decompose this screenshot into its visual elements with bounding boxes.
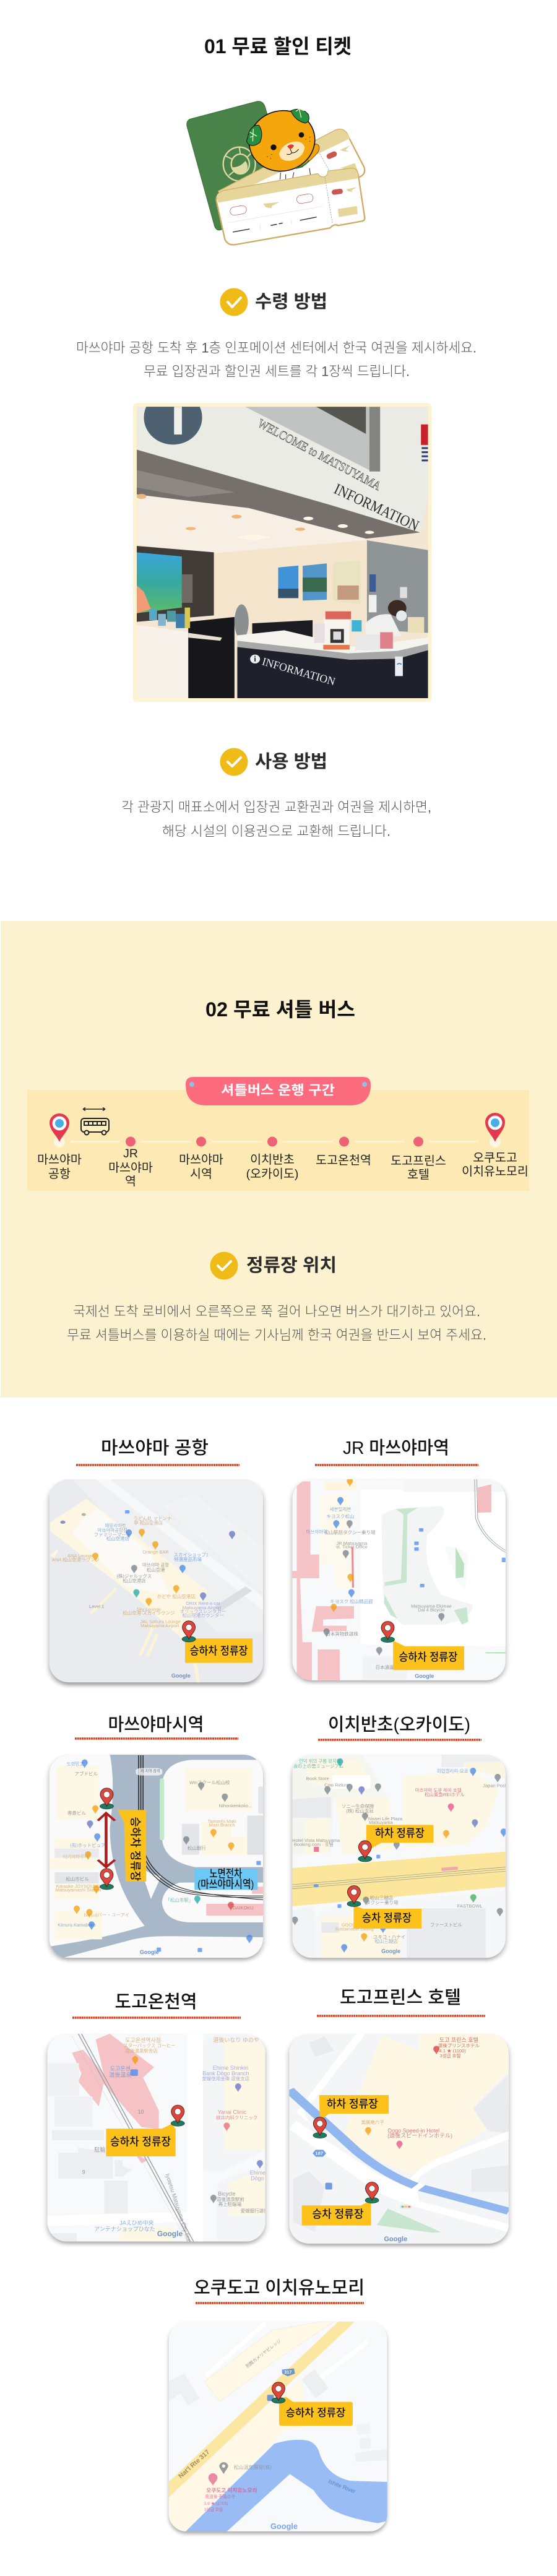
map image: Tamenhi Maki [208, 1818, 236, 1824]
callout: vertical boarding stop [118, 1810, 146, 1882]
map image: 美膳庵六子 [361, 2119, 384, 2125]
callout: boarding stop: 승하차 정류장 [190, 1645, 248, 1657]
stop labels: 시역 [190, 1167, 212, 1181]
callout: tram station [194, 1867, 257, 1891]
map image: JR Matsuyama [336, 1541, 368, 1546]
map image: 日本貨物鉄道株 [326, 1630, 358, 1636]
pill: route title: 셔틀버스 운행 구간 [221, 1083, 335, 1098]
text block: how to use: 각 관광지 매표소에서 입장권 교환권과 여권을 제시하면, [121, 800, 431, 815]
map image: ファーストビル [430, 1922, 462, 1927]
map image [289, 2034, 509, 2244]
map image: アブドビル [75, 1770, 98, 1776]
stop labels: 역 [125, 1175, 136, 1188]
back ticket [218, 129, 365, 212]
photo: airport information centre: i [254, 654, 256, 663]
stop labels: 오쿠도고 [473, 1151, 517, 1165]
pin marker [272, 2382, 285, 2403]
google mark: Google [171, 1672, 191, 1679]
route strip: shuttle bus section [27, 1077, 529, 1191]
map image [292, 1478, 506, 1680]
map image [292, 1755, 507, 1958]
map image: 마츠야마 도큐 레이 호텔 [415, 1787, 462, 1793]
map image: ソニー生命保険 [342, 1803, 374, 1809]
map image: (株)ジャルックス [116, 1573, 152, 1579]
map image: FASTBOWL [457, 1903, 483, 1909]
map image: Sustainable Dining [335, 1926, 374, 1932]
google mark: Google [384, 2236, 407, 2243]
stops [126, 1136, 423, 1146]
stop labels [37, 1147, 529, 1188]
map image: Nat'l Rte 317 [178, 2448, 211, 2480]
map image: 奥道後 壱湯の守 [205, 2494, 235, 2499]
map image: 오쿠도고 이치유노모리 [206, 2486, 257, 2493]
map panel: Matsuyama Airport [50, 1438, 263, 1685]
map image: Winスクール松山校 [189, 1779, 230, 1785]
search pill: 이 지역 검색 [140, 1768, 160, 1773]
map image: 「松山市駅」 [165, 1896, 193, 1903]
map image: Ehime [250, 2170, 266, 2176]
map image: Bank Dōgo Branch [202, 2070, 249, 2077]
map image: Matsuyamashi Station [56, 1887, 101, 1893]
map image: 道後温泉駅前 [217, 2196, 244, 2202]
map image: Dogo Speed-in Hotel [388, 2127, 439, 2133]
photo: airport information centre: WELCOME to MATSUYAMA [256, 417, 384, 493]
map image: Level 1 [89, 1604, 104, 1609]
map image: 道後プリンスホテル [438, 2042, 480, 2048]
heading: 01 free discount ticket: 01 무료 할인 티켓 [204, 35, 352, 58]
stop labels: 도고프린스 [391, 1154, 446, 1168]
text block: stop location [67, 1303, 486, 1343]
map image: スカイショップ1 [173, 1552, 209, 1557]
map image: 3성급 호텔 [204, 2507, 223, 2512]
stop labels: 이치반초 [250, 1153, 295, 1167]
map image: 마쓰야마 공항 [142, 1562, 169, 1568]
map title: 마쓰야마시역 [108, 1714, 204, 1735]
map image: 松山温泉開発(株) [234, 2464, 272, 2470]
map image: ファミリーマート [94, 1532, 131, 1537]
google mark: Google [157, 2229, 183, 2238]
callout: drop-off stop [319, 2095, 389, 2120]
map title: 오쿠도고 이치유노모리 [194, 2278, 365, 2298]
stop labels: 호텔 [407, 1168, 430, 1182]
pin marker: boarding [365, 2182, 379, 2203]
map image: JAえひめ中央 [119, 2219, 154, 2226]
map image: 道後温泉 [109, 2071, 131, 2078]
stop labels: 마쓰야마 [37, 1153, 82, 1167]
map image: タクシー乗り場 [366, 1899, 399, 1905]
callout: vertical boarding stop: 승하차 정류장 [129, 1817, 141, 1881]
map image: 坂の上の雲ミュージアム [293, 1763, 343, 1769]
map image: Hotel Vista Matsuyama [292, 1838, 340, 1843]
callout: boarding stop [106, 2124, 176, 2156]
icon: bus with arrow [81, 1108, 109, 1135]
map image: 317 [284, 2369, 291, 2375]
mascot: orange character [243, 104, 321, 179]
map image: 도고온센역사점 [125, 2036, 161, 2043]
map image: オリックスレンタカー [180, 1609, 226, 1614]
callout: boarding stop [302, 2200, 371, 2226]
map image: 세븐일레븐 [330, 1506, 351, 1512]
map image: 松山市ビル [66, 1875, 89, 1882]
pin: end [485, 1113, 505, 1148]
passport [187, 102, 295, 230]
text block: how to receive: 마쓰야마 공항 도착 후 1층 인포메이션 센터에서 한국 여권을 제시하세요. [76, 340, 477, 355]
map image [50, 1755, 263, 1958]
map image: 柳井内科クリニック [216, 2114, 257, 2120]
map panel: JR Matsuyama Station [292, 1438, 506, 1682]
callout: boarding stop: 승하차 정류장 [286, 2407, 346, 2419]
text block: how to use [121, 800, 431, 839]
map image: 회업갤러리-묘쿄 [437, 1768, 468, 1774]
map image: スターバックス コーヒー [123, 2042, 175, 2048]
pin: start [50, 1113, 69, 1148]
callout: tram station: (마쓰야마시역) [197, 1878, 254, 1891]
subheading: how to receive: 수령 방법 [255, 292, 327, 312]
map image: 道後いなり ゆのや [213, 2036, 259, 2043]
map image: 松山駅前タクシー乗り場 [324, 1529, 376, 1535]
map image: 亭 松山空港店 [134, 1519, 163, 1526]
check icon: stop location [210, 1251, 238, 1280]
map image: Iyotetsu Matsuyama City Station [164, 2172, 194, 2250]
map image [169, 2322, 387, 2531]
map image: 松山空港 スカイラウンジ [123, 1609, 175, 1615]
map image: 再上駐輪場 [218, 2201, 242, 2207]
map image: GOOD TIMES [342, 1922, 371, 1927]
map image [48, 2034, 269, 2250]
map image: Matsuyama Airport [140, 1623, 179, 1628]
map title: 도고온천역 [115, 1992, 197, 2012]
map image: Kimura Kamaboko [58, 1922, 96, 1927]
map image: 3성급 호텔 [440, 2053, 461, 2059]
map image: Cow Return [324, 1782, 349, 1787]
map image: 松山東急REIホテル [425, 1791, 465, 1797]
map title: 마쓰야마 공항 [101, 1438, 209, 1458]
map image: 패밀리마트 [105, 1522, 126, 1528]
map image: 別館カメリヤビレッジ [244, 2338, 282, 2369]
pin marker [182, 1621, 196, 1642]
pin marker [171, 2105, 184, 2126]
map image: JAL Sakura Lounge [140, 1619, 181, 1624]
map image: 特選産品市場 [174, 1556, 202, 1562]
map image: 마쓰야마역 [306, 1528, 327, 1534]
map image: Booking.com · 호텔 [294, 1841, 334, 1847]
map image: 도렌밍고 [67, 1760, 84, 1766]
map image: 타기야마우라 [63, 1853, 89, 1859]
callout: tram station: 노면전차 [209, 1867, 243, 1880]
subheading: stop location: 정류장 위치 [246, 1255, 337, 1276]
callout: boarding stop: 승차 정류장 [362, 1912, 412, 1924]
map image: (道後スピードインホテル) [387, 2132, 452, 2139]
route line [71, 1141, 478, 1143]
callout: boarding stop [393, 1641, 464, 1670]
map panel: Matsuyama City Station [50, 1714, 263, 1960]
map image: 松山空港店 [123, 1577, 146, 1583]
photo: airport information centre: INFORMATION [261, 655, 337, 688]
map image: 松山空港カウンター [182, 1612, 224, 1618]
map image: ANA Lounge [67, 1553, 93, 1558]
stop labels: 마쓰야마 [179, 1153, 223, 1167]
map image: 도고온센 [110, 2066, 131, 2072]
photo: airport information centre: INFORMATION [331, 481, 421, 535]
map panel: Ichibancho (Okaido) [292, 1714, 507, 1960]
map image: Book Store [306, 1776, 329, 1781]
map image: Dai 4 Bicycle [418, 1607, 445, 1612]
callout: boarding stop: 승하차 정류장 [110, 2136, 171, 2148]
text block: stop location: 국제선 도착 로비에서 오른쪽으로 쭉 걸어 나오면 버스가 대기하고 있어요. [73, 1303, 480, 1320]
arrow: between stops [98, 1813, 115, 1867]
map image: Karaoke JOYSOUND [56, 1883, 101, 1889]
map image: ユキコ・ハナイ [373, 1934, 405, 1940]
stop labels: 이치유노모리 [462, 1165, 529, 1178]
map image: 도고 프린스 호텔 [439, 2036, 478, 2043]
check icon: how to receive [220, 288, 248, 316]
map image: Matsuyama Ekimae [411, 1603, 452, 1609]
map image: 4.1 ★ (1100) [439, 2048, 466, 2054]
callout: drop-off stop: 하차 정류장 [327, 2098, 378, 2110]
stop labels: 공항 [48, 1167, 71, 1181]
google mark: Google [140, 1949, 159, 1955]
map image: 愛媛信用金庫 道後支店 [202, 2075, 250, 2081]
stop labels: JR [123, 1147, 138, 1160]
map image: Yanai Clinic [218, 2109, 247, 2116]
pin marker: drop-off [313, 2117, 327, 2138]
map image: 松山三越店 [370, 1895, 394, 1901]
map panel: Dogo Onsen Station [48, 1992, 269, 2250]
map title: 이치반초(오카이도) [328, 1714, 470, 1735]
map image: Matsuyama [369, 1820, 393, 1825]
map image: Ishite River [327, 2478, 356, 2495]
map image: 10 [138, 2109, 144, 2115]
callout: drop-off stop [366, 1825, 434, 1849]
map title: 도고프린스 호텔 [340, 1988, 461, 2008]
map image: st. Ticket Office [336, 1544, 368, 1549]
callout: boarding stop [185, 1638, 253, 1663]
map image: 마쓰야마공항점 [98, 1527, 127, 1533]
map image [50, 1479, 263, 1682]
callout: boarding stop: 승하차 정류장 [399, 1651, 457, 1664]
map image: Main Branch [209, 1822, 235, 1828]
callout: boarding stop: 승차 정류장 [312, 2208, 363, 2220]
map image: ANA 松山空港ラウンジ [52, 1556, 100, 1562]
text block: how to receive [76, 340, 477, 379]
map image: Bicycle [218, 2191, 236, 2197]
photo: airport information centre [133, 391, 431, 702]
front ticket [216, 168, 365, 244]
check icon: how to use [220, 748, 248, 776]
pin marker: drop-off [358, 1841, 372, 1862]
map image: アンテナショップひなた [94, 2226, 155, 2232]
map image: 3.9 ★ (1705) [204, 2502, 228, 2506]
text block: stop location: 무료 셔틀버스를 이용하실 때에는 기사님께 한국 여권을 반드시 보여 주세요. [67, 1327, 486, 1343]
map image: (株) 松山支社 [346, 1807, 374, 1813]
subheading: how to use: 사용 방법 [255, 751, 327, 772]
stop labels: 마쓰야마 [108, 1161, 153, 1175]
callout: boarding stop [279, 2397, 353, 2426]
map image: Orange BAR [142, 1549, 169, 1555]
map image: 専寿ビル [67, 1810, 86, 1816]
stop labels: (오카이도) [246, 1167, 298, 1181]
text block: how to use: 해당 시설의 이용권으로 교환해 드립니다. [162, 823, 391, 839]
map image: 松山銀行 [188, 1844, 206, 1851]
map panel: Dogo Prince Hotel [289, 1988, 509, 2246]
google mark: Google [270, 2522, 298, 2531]
stop labels: 도고온천역 [316, 1154, 371, 1167]
google mark: Google [381, 1948, 400, 1955]
map image: 駐輪 [94, 2146, 105, 2153]
map panel: Okudogo Ichiyunomori [169, 2278, 387, 2534]
map image: (有)ホットピュア [70, 1842, 105, 1848]
map image: 松山三越店 [374, 1938, 398, 1944]
pin marker: upper [100, 1788, 113, 1809]
map image: 松山空港店 [106, 1535, 130, 1541]
map image: bar(ω)バー・ユーアイ [84, 1912, 129, 1917]
pin marker: lower [100, 1869, 113, 1890]
map image: Nihonkenkoko... [219, 1803, 252, 1809]
map image: 9 [82, 2169, 85, 2175]
map image: Japan Post [483, 1783, 507, 1788]
section background: shuttle bus [1, 921, 557, 1398]
map image: ORIX Rent-a-car [186, 1601, 220, 1606]
map image: Nissei Life Plaza [368, 1816, 403, 1822]
pin marker: boarding [347, 1885, 361, 1907]
map image: Matsuyama Airport [183, 1605, 222, 1610]
map image: 愛媛銀行道後 [241, 2207, 269, 2213]
map image: 道後温泉駅舎店 [125, 2047, 158, 2054]
map image: Dōgo [251, 2175, 264, 2181]
map image: 187 [316, 2150, 323, 2156]
heading: 02 free shuttle bus: 02 무료 셔틀 버스 [205, 998, 355, 1021]
map image: 日本通運 [375, 1664, 394, 1670]
map image: うどん処 マドンナ [133, 1515, 171, 1521]
map image: Sky Lounge [137, 1606, 161, 1612]
callout: drop-off stop: 하차 정류장 [375, 1827, 425, 1839]
map title: JR 마쓰야마역 [343, 1438, 449, 1458]
map image: かどや 松山空港店 [157, 1593, 196, 1599]
text block: how to receive: 무료 입장권과 할인권 세트를 각 1장씩 드립니다. [144, 364, 410, 379]
search pill [136, 1768, 162, 1776]
map image: DAIKOKU [233, 1905, 254, 1911]
google mark: Google [415, 1673, 434, 1679]
map image: キヨスク松山 [327, 1513, 354, 1519]
map image: キヨスク 松山精品館 [330, 1598, 373, 1604]
pin marker [381, 1621, 395, 1643]
pill: route title [186, 1077, 371, 1105]
map image: Ehime Shinkin [213, 2065, 248, 2071]
map image: 松山空港 [147, 1567, 165, 1573]
illustration: passport, mascot and tickets [187, 102, 365, 244]
callout: boarding stop [353, 1905, 421, 1929]
map image: 언덕 위의 구름 뮤지엄 [299, 1758, 341, 1764]
